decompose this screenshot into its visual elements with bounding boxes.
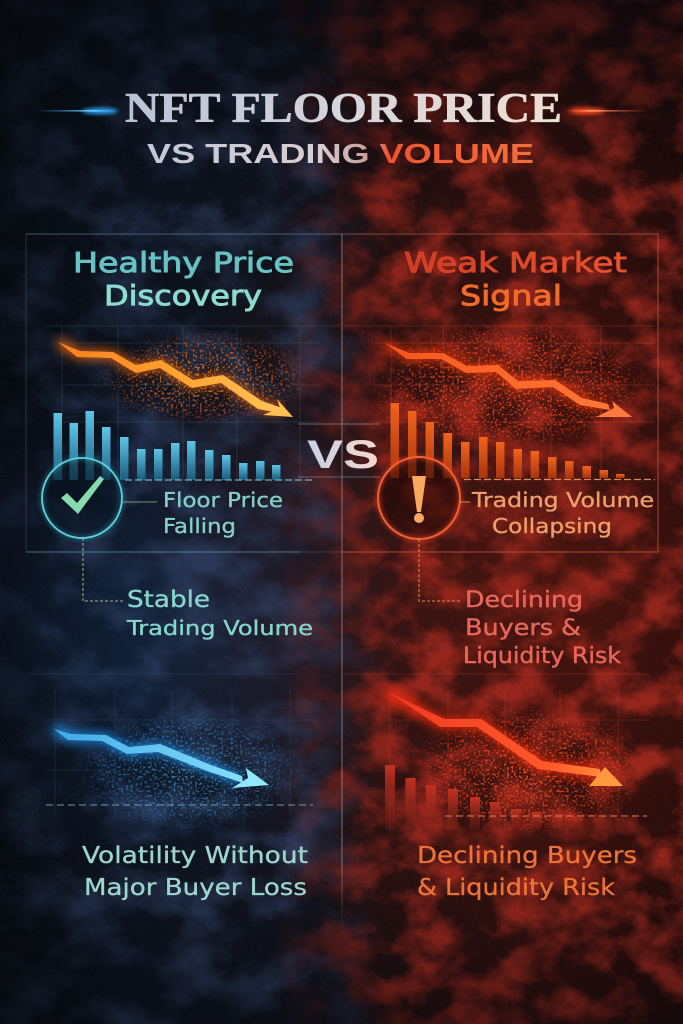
label: floor price falling: Floor Price (163, 488, 283, 512)
bars: collapsing volume right (390, 403, 624, 478)
sparks: left lower (70, 705, 310, 835)
vs badge: VS (307, 433, 379, 477)
heading: weak market signal: Signal (460, 279, 562, 312)
label: trading volume collapsing: Trading Volume (471, 488, 654, 512)
connector: declining buyers (419, 539, 462, 601)
arrow: blue volatility (54, 729, 269, 788)
grid: right lower chart (344, 674, 650, 830)
grid: right upper chart (344, 326, 655, 480)
heading: healthy price discovery: Discovery (104, 279, 262, 312)
baseline: lower left (46, 804, 313, 806)
caption: declining buyers and liquidity risk (417, 843, 637, 901)
bars: declining volume lower right (385, 765, 625, 829)
grid: left upper chart (45, 326, 340, 480)
label: trading volume collapsing: Collapsing (492, 514, 612, 538)
title line 2: VS TRADING VOLUME (147, 138, 534, 169)
label: stable trading volume: Trading Volume (126, 616, 313, 640)
sparks: right lower (405, 700, 655, 840)
label: declining buyers and liquidity risk: Buyers & (465, 616, 581, 641)
caption: volatility without major buyer loss: Volatility Without (82, 843, 308, 869)
label: declining buyers and liquidity risk: Liquidity Risk (463, 644, 621, 669)
label: stable trading volume: Stable (127, 587, 210, 613)
sparks: left upper (95, 330, 315, 426)
sparks: right upper (360, 315, 660, 455)
label: declining buyers and liquidity risk (463, 588, 621, 669)
heading: healthy price discovery: Healthy Price (73, 246, 294, 279)
heading: weak market signal (404, 246, 627, 312)
label: floor price falling: Falling (163, 514, 236, 538)
comparison frame (26, 234, 658, 552)
caption: volatility without major buyer loss (82, 843, 308, 901)
caption: declining buyers and liquidity risk: & Liquidity Risk (417, 875, 616, 901)
connector: floor price (123, 501, 157, 503)
baseline: lower right (445, 815, 647, 817)
baseline: left (125, 479, 312, 481)
heading: weak market signal: Weak Market (404, 246, 627, 279)
grid: left lower chart (30, 674, 310, 815)
label: declining buyers and liquidity risk: Declining (465, 588, 583, 613)
label: trading volume collapsing (471, 488, 654, 538)
title flare: red (565, 108, 650, 114)
centre divider (342, 234, 343, 930)
icon: warning circle (378, 457, 460, 539)
heading: healthy price discovery (73, 246, 294, 312)
title line 1: NFT FLOOR PRICE (125, 86, 562, 132)
baseline: right (464, 478, 655, 480)
connector: stable volume (83, 538, 123, 601)
arrow: orange floor price left (58, 342, 293, 417)
arrow: red liquidity (388, 692, 623, 786)
title flare: blue (35, 108, 120, 114)
arrow: orange-red floor price right (385, 343, 632, 417)
connector: trading volume (460, 501, 470, 503)
caption: volatility without major buyer loss: Major Buyer Loss (84, 875, 307, 901)
caption: declining buyers and liquidity risk: Declining Buyers (417, 843, 637, 869)
icon: check circle (42, 458, 122, 538)
vs badge (298, 424, 380, 477)
label: floor price falling (163, 488, 283, 538)
label: stable trading volume (126, 587, 313, 640)
title (35, 86, 650, 169)
bars: stable volume left (54, 411, 280, 480)
